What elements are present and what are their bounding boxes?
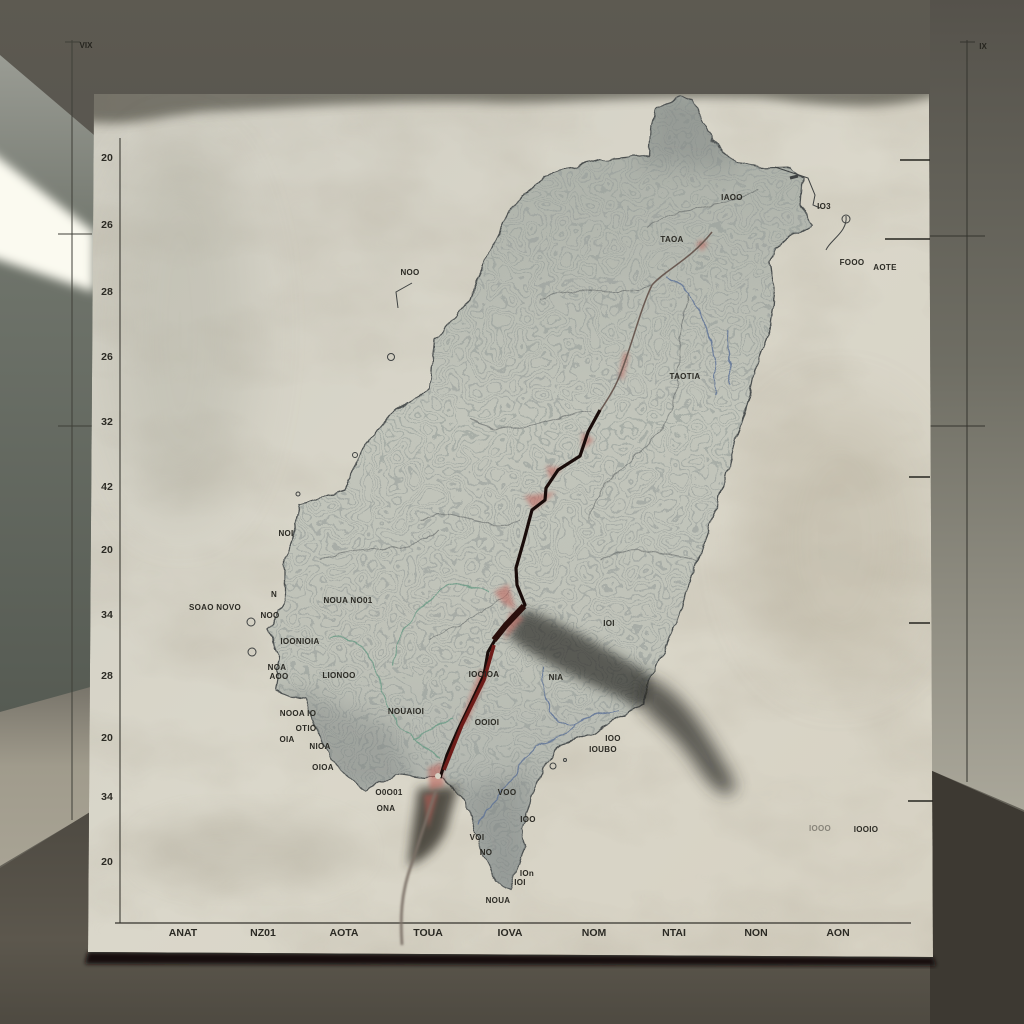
map: islets west bbox=[247, 283, 566, 769]
paper right-side shading bbox=[750, 400, 930, 680]
map: islets north-east bbox=[775, 167, 850, 250]
y axis labels: 20 bbox=[101, 152, 113, 164]
map: place labels: NO bbox=[480, 848, 492, 857]
map: place labels: AOTE bbox=[873, 263, 897, 272]
map: place labels: IOI bbox=[514, 878, 526, 887]
map: place labels: O0O01 bbox=[375, 788, 403, 797]
map: island landmass bbox=[260, 95, 820, 895]
x axis labels: IOVA bbox=[498, 927, 523, 939]
map: gray drainage lines bbox=[320, 190, 760, 640]
map: northern and southern tone bbox=[270, 95, 735, 895]
panel: paper sheet bbox=[80, 80, 940, 958]
map: place labels: SOAO NOVO bbox=[189, 603, 241, 612]
map: blue rivers bbox=[478, 277, 730, 825]
map: place labels: NOI bbox=[278, 529, 294, 538]
map: shadow of tear over land bbox=[508, 610, 652, 707]
outer right measuring line bbox=[930, 40, 985, 782]
map: place labels bbox=[189, 193, 897, 905]
background: floor bbox=[0, 812, 1024, 1024]
map: place labels: AOO bbox=[269, 672, 289, 681]
map: place labels: NOUA NO01 bbox=[323, 596, 373, 605]
map: place labels: IOOIOA bbox=[469, 670, 499, 679]
map: vein texture bbox=[260, 95, 820, 895]
fault: red stain bbox=[424, 240, 708, 829]
map: place labels: LIONOO bbox=[322, 671, 356, 680]
y axis labels: 26 bbox=[101, 351, 113, 363]
map: place labels: NOUA bbox=[486, 896, 510, 905]
map: crossing dot bbox=[435, 773, 441, 779]
x axis labels: AON bbox=[826, 927, 850, 939]
x axis labels: NON bbox=[744, 927, 768, 939]
x axis labels: NTAI bbox=[662, 927, 686, 939]
x axis labels: NOM bbox=[582, 927, 606, 939]
fault: black crack bbox=[440, 410, 600, 778]
y axis labels: 42 bbox=[101, 481, 113, 493]
background: light streak on left wall bbox=[0, 135, 94, 292]
paper drop shadow bbox=[85, 952, 936, 966]
y axis labels: 32 bbox=[101, 416, 113, 428]
map: place labels: NOO bbox=[400, 268, 420, 277]
fault: wider crack at shadow start bbox=[494, 606, 524, 640]
map: place labels: IOO bbox=[605, 734, 621, 743]
map: place labels: VOO bbox=[498, 788, 516, 797]
fault: thin northern line bbox=[596, 232, 712, 418]
map: place labels: IOI bbox=[603, 619, 615, 628]
map: place labels: NIOA bbox=[309, 742, 331, 751]
y axis labels: 28 bbox=[101, 286, 113, 298]
x axis labels: NZ01 bbox=[250, 927, 276, 939]
map: place labels: OIOA bbox=[312, 763, 334, 772]
background: right wall bbox=[930, 0, 1024, 810]
map: place labels: IOOIO bbox=[854, 825, 878, 834]
outer left measuring line bbox=[58, 40, 92, 820]
map: place labels: NOOA IO bbox=[280, 709, 316, 718]
map: place labels: N bbox=[271, 590, 277, 599]
y axis labels: 34 bbox=[101, 791, 113, 803]
map: place labels: ONA bbox=[377, 804, 395, 813]
x axis labels: ANAT bbox=[169, 927, 198, 939]
map: place labels: FOOO bbox=[840, 258, 864, 267]
fault: tail through the lower sheet bbox=[401, 790, 436, 945]
map: green rivers bbox=[330, 583, 490, 758]
map: place labels: IOO bbox=[520, 815, 536, 824]
map: shadow of tear over paper bbox=[642, 675, 736, 794]
y axis labels bbox=[101, 152, 113, 868]
outer corner label right: IX bbox=[979, 42, 987, 51]
x axis labels: TOUA bbox=[413, 927, 443, 939]
map: place labels: OIA bbox=[279, 735, 295, 744]
map: place labels: NIA bbox=[549, 673, 563, 682]
map: place labels: IOOO bbox=[809, 824, 831, 833]
map: place labels: IOUBO bbox=[589, 745, 617, 754]
map: place labels: VOI bbox=[470, 833, 484, 842]
y axis labels: 34 bbox=[101, 609, 113, 621]
fault: dark red wound bbox=[444, 645, 494, 770]
map: place labels: IAOO bbox=[721, 193, 743, 202]
map: place labels: NOO bbox=[260, 611, 280, 620]
y axis labels: 20 bbox=[101, 856, 113, 868]
x axis bbox=[115, 922, 911, 924]
map: place labels: NOA bbox=[268, 663, 286, 672]
map: lower tear shadow bbox=[408, 786, 458, 866]
map: place labels: IO3 bbox=[817, 202, 831, 211]
y axis labels: 28 bbox=[101, 670, 113, 682]
outer corner label left: VIX bbox=[80, 41, 93, 50]
paper mottling bbox=[88, 94, 934, 958]
background: right floor shadow bbox=[930, 770, 1024, 1024]
paper top shadow bbox=[94, 94, 929, 130]
map: place labels: TAOTIA bbox=[670, 372, 700, 381]
y axis labels: 20 bbox=[101, 732, 113, 744]
paper left-side shading bbox=[112, 166, 245, 498]
y axis labels: 26 bbox=[101, 219, 113, 231]
map: place labels: NOUAIOI bbox=[388, 707, 424, 716]
background: left wall bbox=[0, 55, 94, 712]
map: place labels: TAOA bbox=[660, 235, 684, 244]
x axis labels bbox=[169, 927, 850, 939]
map: place labels: IOONIOIA bbox=[280, 637, 320, 646]
y axis bbox=[119, 138, 121, 923]
x axis labels: AOTA bbox=[330, 927, 359, 939]
right axis tick marks bbox=[885, 160, 933, 801]
map: place labels: IOn bbox=[520, 869, 534, 878]
paper lower-left shading bbox=[162, 820, 344, 878]
background: left floor highlight bbox=[0, 686, 94, 866]
y axis labels: 20 bbox=[101, 544, 113, 556]
map: place labels: OOIOI bbox=[475, 718, 499, 727]
map: place labels: OTIO bbox=[296, 724, 316, 733]
